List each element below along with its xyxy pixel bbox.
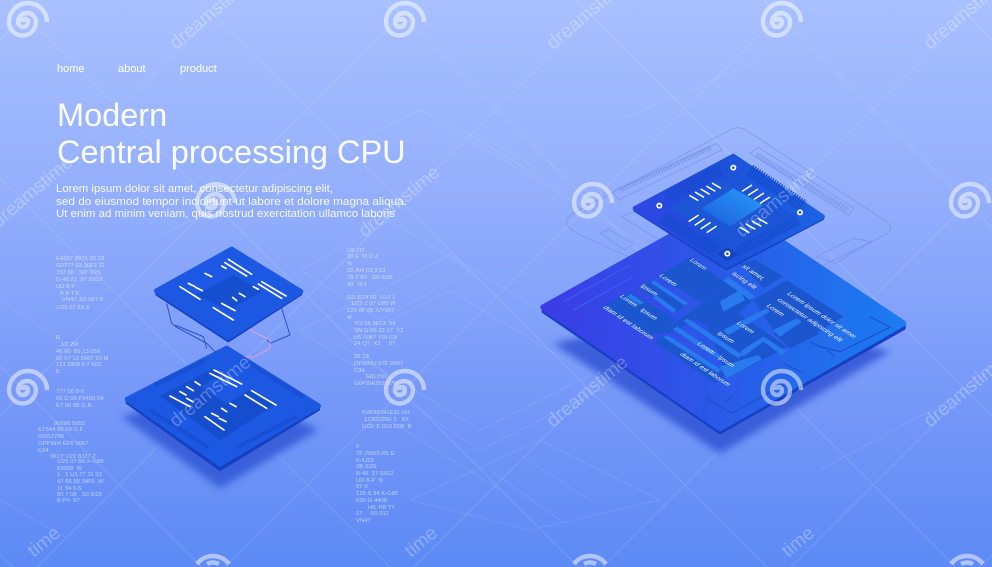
- data text column: left: 50 57 13 5567 10 M: [56, 356, 108, 362]
- data text column: centre: 1Z30D25F 5 8X: [364, 417, 409, 423]
- data text column: centre: 87 K: [356, 484, 368, 490]
- data text column: left: 65 C 03 P3405 54: [56, 396, 104, 402]
- data text column: centre: 0-/U23: [356, 458, 374, 464]
- data text column: centre: HIL R8 TY: [368, 505, 395, 511]
- circuit dark blocks: [603, 257, 843, 383]
- data text column: left: 1 1 U1 77 11 33: [57, 472, 102, 478]
- data text column: centre: Y/J 55 96T3 64: [354, 321, 396, 327]
- data text column: centre: EKLY/U: [366, 374, 387, 380]
- board labels: Lorem Ipsum: [618, 294, 659, 321]
- board labels: Lorem: [764, 304, 786, 318]
- data text column: centre: G0P2HU2Y/S7P: [354, 381, 398, 387]
- small processor chip: [635, 156, 823, 269]
- board labels: Lorem Ipsum: [695, 342, 737, 369]
- board labels: iscing elit: [730, 272, 759, 290]
- watermark text: dreamstime: [732, 162, 821, 242]
- data text column: left: GNS7788: [38, 434, 65, 440]
- data text column: left: 0KLY U22 8J27 Z: [50, 454, 96, 460]
- data text column: centre: 4/: [347, 315, 352, 321]
- watermark text: time: [778, 523, 819, 562]
- data text column: left: 757 00 S0! 3/25: [56, 270, 102, 276]
- data text column: left: E4507 8876 30 23: [56, 256, 105, 262]
- data text column: centre: U8 ZD: [347, 248, 364, 254]
- board shadow: [553, 307, 890, 453]
- data text column: centre: 1/23 Z 07 U89 W: [351, 301, 396, 307]
- description text: [56, 183, 407, 220]
- title: Central processing CPU: [57, 134, 406, 170]
- main board: [543, 205, 904, 433]
- circuit light traces: [627, 277, 802, 378]
- data text column: left: VN47 3/2 067 P: [62, 297, 104, 303]
- data text column: centre: 3B 3/25: [356, 464, 377, 470]
- data text column: centre: 030-G 4408: [356, 498, 388, 504]
- watermark text: dreamstime: [166, 352, 255, 432]
- data text column: left: E7 06 88 G R: [56, 403, 92, 409]
- watermark text: dreamstime: [355, 162, 444, 242]
- data text column: left: 47 66 55 3455 W: [57, 479, 104, 485]
- board labels: Ipsum: [715, 331, 736, 345]
- data text column: centre: 125 S 94 K-G80: [356, 491, 399, 497]
- board labels: sit amet,: [740, 264, 767, 282]
- board labels: diam id est laborum: [601, 305, 656, 341]
- board labels: Lorem ipsum dolor sit amet: [785, 292, 858, 339]
- data text column: centre: U5 0087 Y/H C8: [354, 335, 398, 341]
- data text column: left: 1/25 07 89 X: [56, 305, 89, 311]
- data text column: centre: [347, 248, 412, 524]
- board labels: Ipsum: [638, 284, 660, 297]
- data text column: left: 63008 W: [57, 466, 83, 472]
- data text column: centre: 43 7F1: [347, 282, 367, 288]
- watermark text: dreamstime: [543, 352, 632, 432]
- data text column: centre: GGF E 003 D08 B: [362, 424, 412, 430]
- data text column: centre: OPI0NLI 07F 9967: [354, 361, 403, 367]
- data text column: centre: #: [356, 444, 360, 450]
- mounting screws: [656, 165, 803, 262]
- data text column: centre: C34: [354, 368, 366, 374]
- board labels: diam id est laborum: [678, 352, 732, 388]
- data text column: centre: 7F Z09/3-R5 E: [356, 451, 395, 457]
- data text column: left: 5: [56, 369, 60, 375]
- data text column: left: 46 00 89,13 058: [56, 349, 101, 355]
- data text column: left: OPPINI4 EF6 9967: [38, 441, 88, 447]
- title: [57, 97, 406, 170]
- shadow under lower chip: [122, 387, 318, 488]
- data text column: left: 11 34 0-5: [57, 486, 82, 492]
- board labels: consectetur adipiscing elit: [775, 298, 844, 343]
- data text column: centre: 24 Q7 X2 07: [354, 341, 395, 347]
- data text column: left: 121 D6/8 5 7 603: [56, 362, 102, 368]
- title: Modern: [57, 97, 167, 133]
- lower chip: [127, 348, 318, 469]
- data text column: centre: 30 E 78 D Z: [347, 254, 379, 260]
- navigation: [57, 63, 217, 75]
- upper chip: [157, 249, 301, 341]
- data text column: centre: 79 T 60 G0 0/25: [347, 275, 393, 281]
- data text column: left: 80 7 08 S0 3/25: [57, 492, 103, 498]
- data text column: left: 1/25 07 89 X-G88: [57, 459, 104, 465]
- data text column: left: J/Z 2W: [60, 342, 79, 348]
- data text column: left: ET544 89 69 G F: [38, 427, 84, 433]
- wireframe socket: [567, 128, 891, 307]
- white pin bars: [689, 183, 770, 233]
- data text column: centre: KW06F0GE11 UH: [362, 410, 410, 416]
- data text column: left: [38, 256, 108, 504]
- right CPU illustration: [543, 128, 904, 453]
- board labels: Lorem: [734, 321, 756, 335]
- data text column: left: D-45 21 97 S912: [56, 277, 102, 283]
- data text column: centre: UD 8-P N: [356, 478, 383, 484]
- data text column: left: B P T1I: [60, 291, 80, 297]
- watermark text: time: [24, 523, 65, 562]
- chip fins: [663, 170, 803, 251]
- data text column: centre: 25 /N4 D2 F13: [347, 268, 386, 274]
- edge traces: [563, 265, 890, 413]
- processor die: [702, 188, 763, 227]
- connector lines: [167, 303, 290, 357]
- data text column: left: E34: [38, 448, 49, 454]
- data text column: left: 8-PY- 97: [57, 498, 80, 504]
- description text: Lorem ipsum dolor sit amet, consectetur adipiscing elit,: [56, 183, 333, 195]
- navigation: home: [57, 63, 85, 75]
- data text column: centre: 125 0F 85 X/Y507: [347, 308, 394, 314]
- left CPU illustration: [122, 249, 318, 488]
- description text: sed do eiusmod tempor incididunt ut labore et dolore magna aliqua.: [56, 196, 407, 208]
- data text column: left: G0777 63 10F2 11: [56, 263, 105, 269]
- data text column: centre: SN G 06 33 17 Y2: [354, 328, 403, 334]
- board labels: [601, 258, 858, 388]
- data text column: centre: B-45 27 S012: [356, 471, 394, 477]
- data text column: left: R: [56, 335, 60, 341]
- data text column: centre: VN47: [356, 518, 371, 524]
- board labels: Lorem: [688, 258, 709, 271]
- data text column: left: 00006 5055: [54, 421, 86, 427]
- watermark text: time: [401, 523, 442, 562]
- data text column: left: 777 00 8-5: [56, 389, 85, 395]
- data text column: centre: %: [347, 261, 353, 267]
- data text column: centre: G0 /6T4 00 U10 1: [347, 295, 395, 301]
- navigation: about: [118, 63, 146, 75]
- description text: Ut enim ad minim veniam, quis nostrud exercitation ullamco laboris: [56, 208, 395, 220]
- board labels: Lorem: [657, 274, 679, 288]
- data text column: left: UD 8-P: [56, 284, 75, 290]
- navigation: product: [180, 63, 217, 75]
- data text column: centre: 17 -50 011: [356, 511, 389, 517]
- data text column: centre: 25 13: [354, 354, 369, 360]
